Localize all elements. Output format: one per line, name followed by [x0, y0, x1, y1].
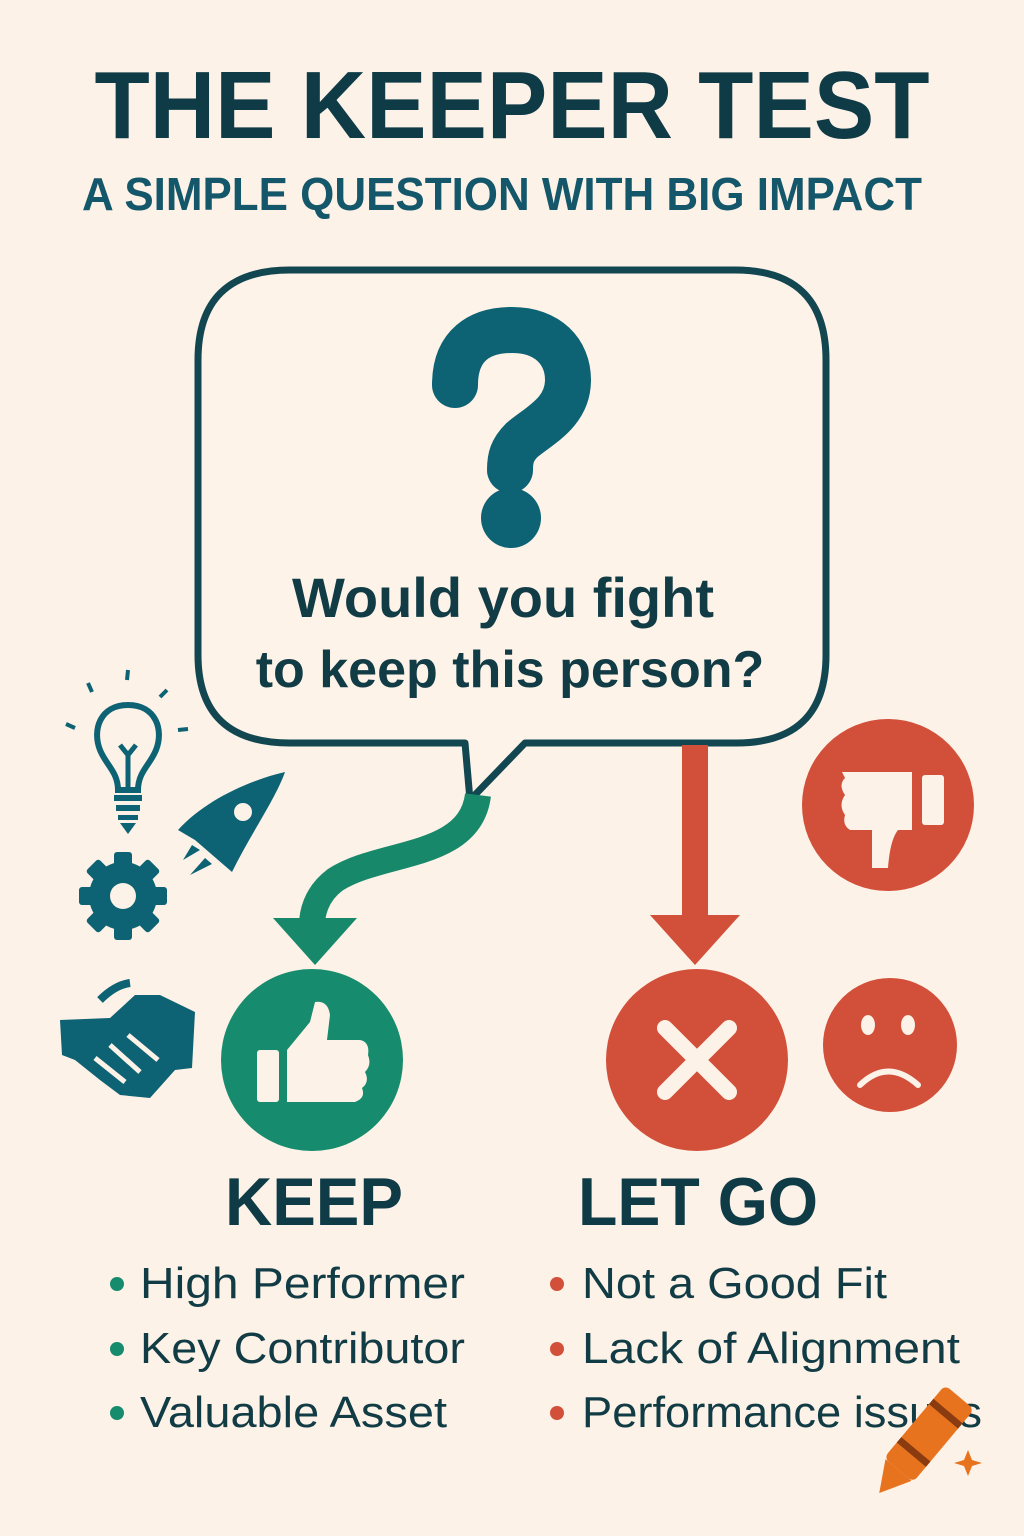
- list: keep: Valuable Asset: [140, 1388, 447, 1437]
- list: let go: Not a Good Fit: [582, 1259, 887, 1308]
- icon: X circle: [606, 969, 788, 1151]
- icon: crayon: [865, 1385, 974, 1505]
- list: keep: High Performer: [140, 1259, 465, 1308]
- speech bubble: to keep this person?: [256, 641, 764, 699]
- icon: gear: [79, 852, 167, 940]
- heading: keep: KEEP: [225, 1164, 403, 1240]
- question text: Would you fight: [292, 566, 714, 629]
- icon: rocket: [178, 772, 285, 875]
- icon: thumbs down circle: [802, 719, 974, 891]
- arrow: keep (green curved): [273, 795, 478, 965]
- list: let go: [550, 1259, 982, 1437]
- list: let go: Performance issues: [582, 1388, 982, 1437]
- list: keep: [110, 1259, 465, 1437]
- icon: thumbs up circle: [221, 969, 403, 1151]
- icon: sparkle: [954, 1450, 982, 1476]
- icon: sad face: [823, 978, 957, 1112]
- subtitle: A SIMPLE QUESTION WITH BIG IMPACT: [82, 168, 922, 220]
- title: THE KEEPER TEST: [94, 52, 930, 159]
- heading: let go: LET GO: [578, 1164, 818, 1240]
- icon: lightbulb: [66, 670, 188, 834]
- speech bubble: [198, 270, 826, 800]
- icon: handshake: [60, 983, 195, 1098]
- list: keep: Key Contributor: [140, 1324, 465, 1373]
- list: let go: Lack of Alignment: [582, 1324, 960, 1373]
- arrow: let go (red): [650, 745, 740, 965]
- icon: question mark: [455, 330, 568, 548]
